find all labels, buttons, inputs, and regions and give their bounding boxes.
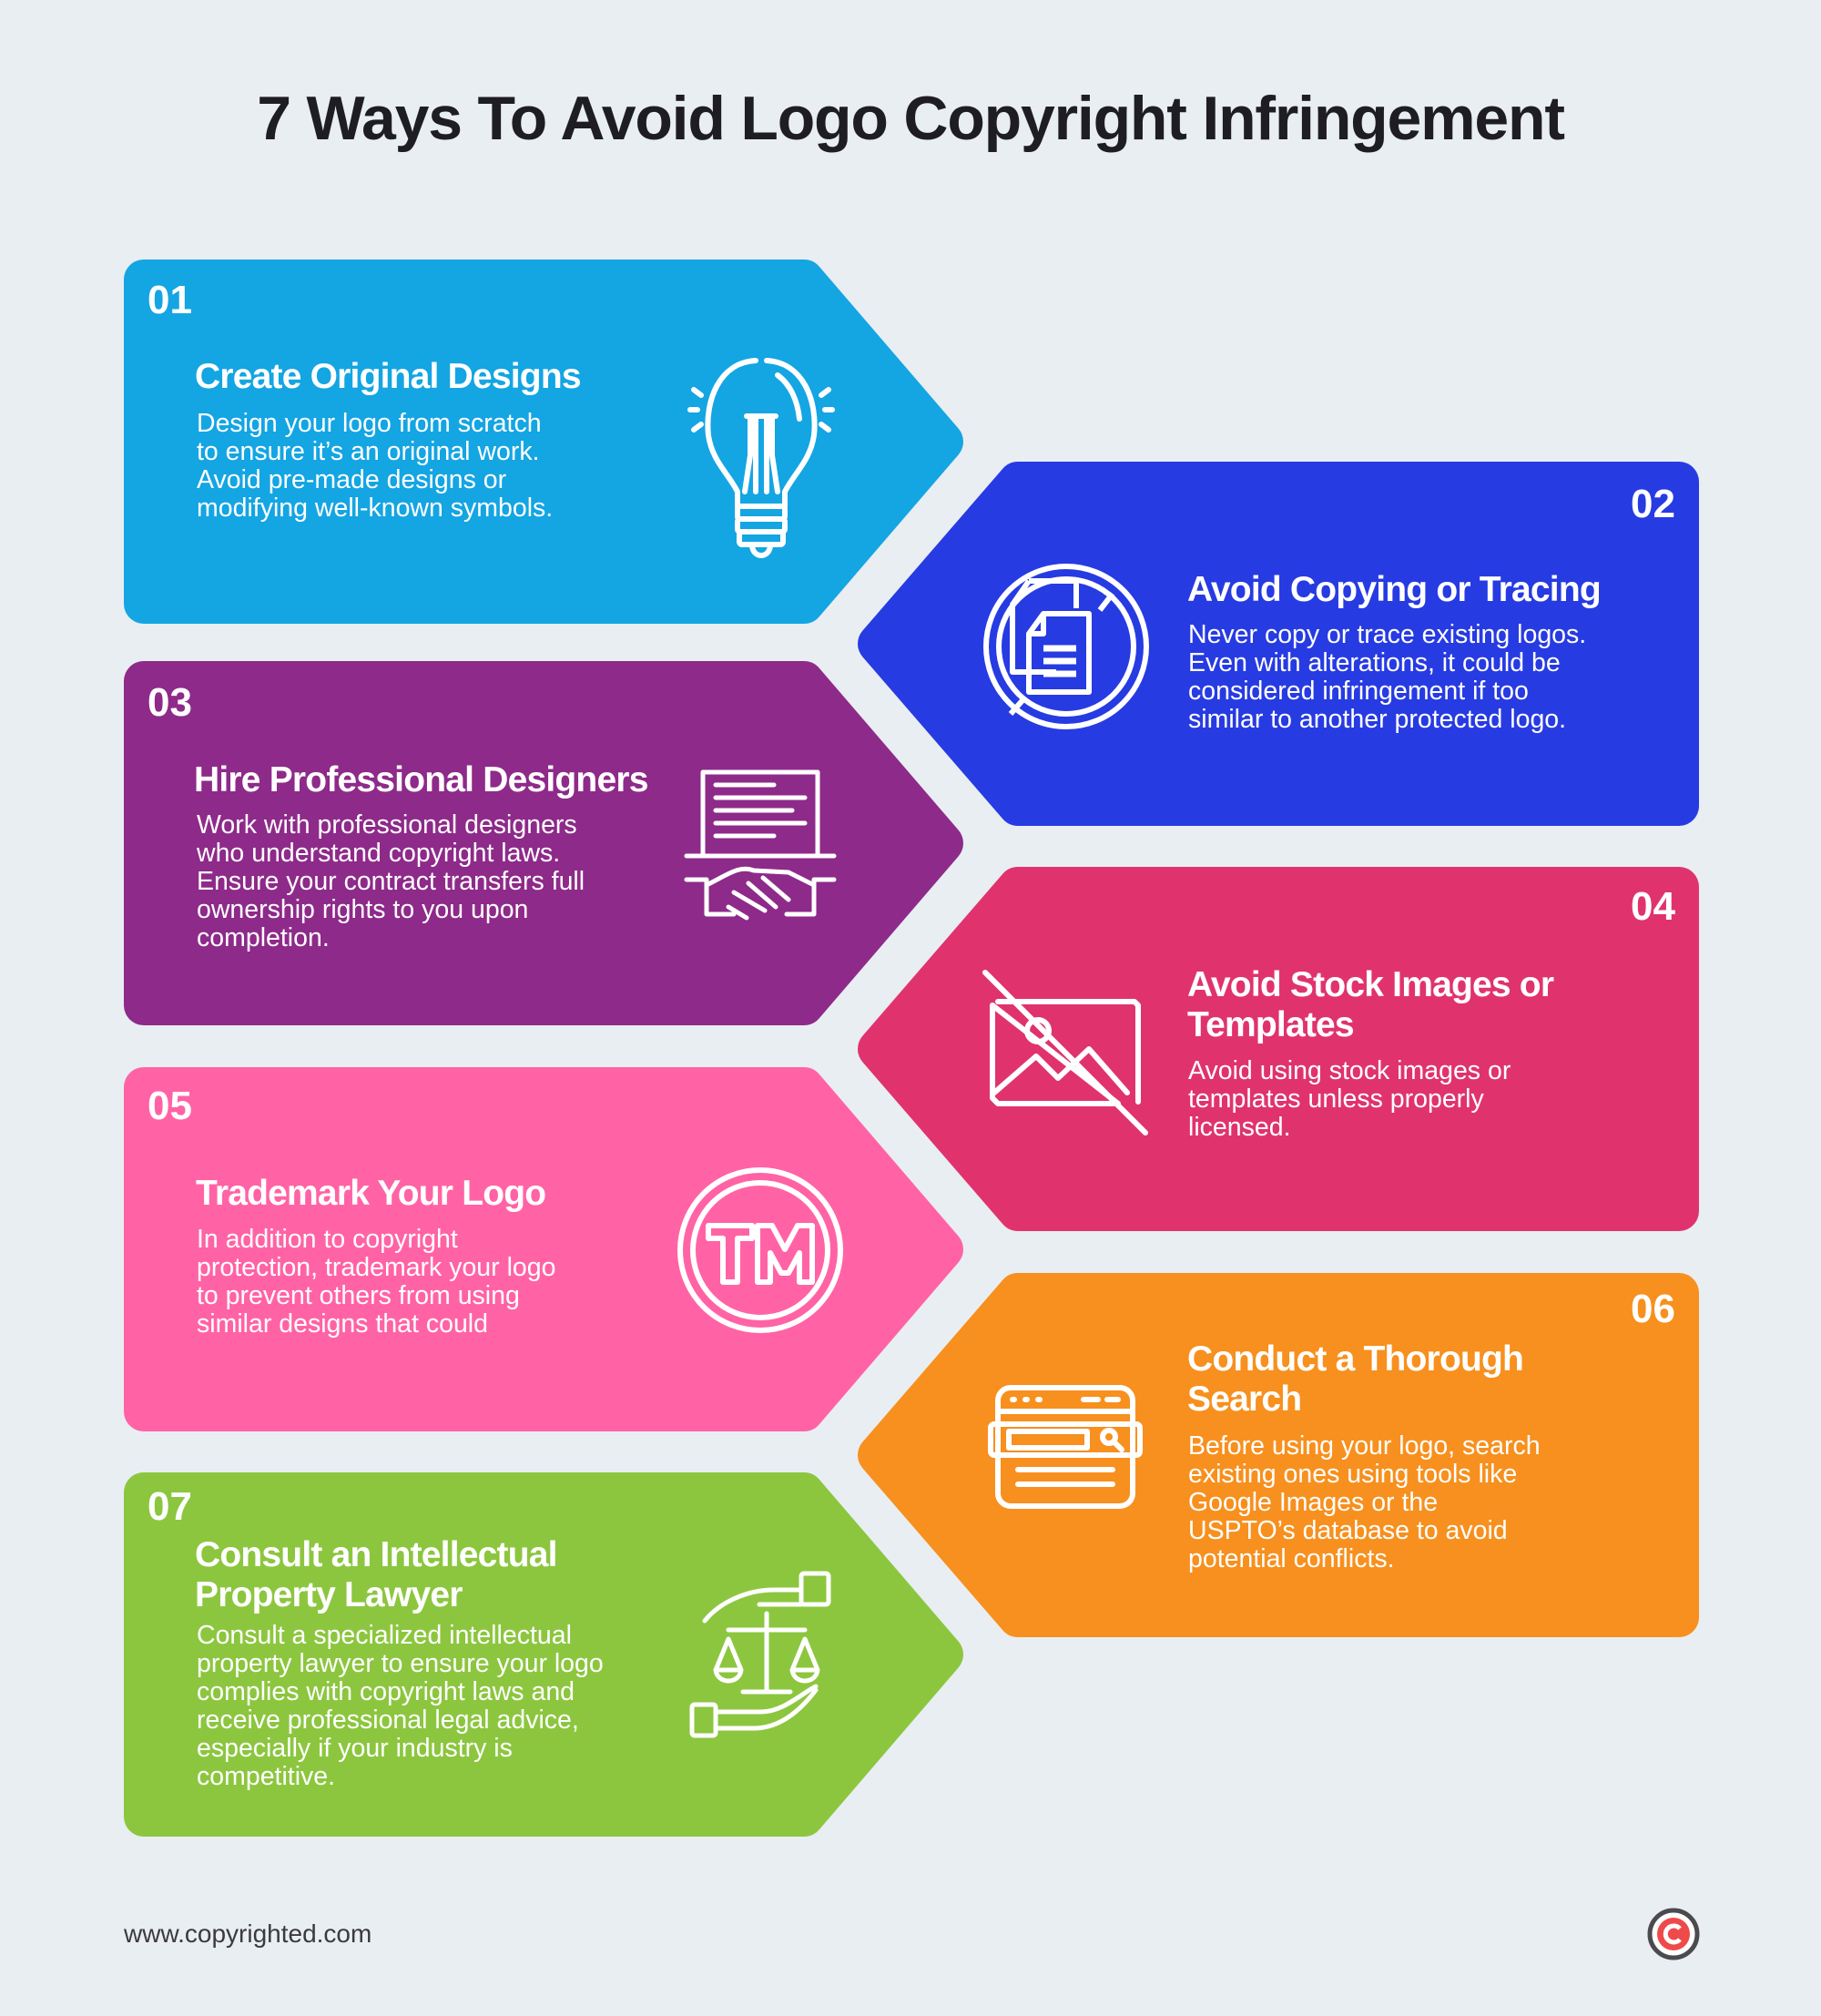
icon: trademark [680,1170,840,1330]
text: Avoid Copying or Tracing [1187,570,1601,609]
panel 6 text [1187,1287,1675,1573]
footer url: www.copyrighted.com [124,1919,371,1948]
text: to prevent others from using [197,1281,520,1310]
text: similar designs that could [197,1309,488,1339]
text: 06 [1631,1287,1675,1331]
text: Even with alterations, it could be [1188,648,1561,677]
text: Avoid pre-made designs or [197,465,506,494]
text: licensed. [1188,1113,1290,1142]
icon: law scales in hands [692,1573,829,1736]
text: potential conflicts. [1188,1544,1395,1573]
footer logo [1648,1909,1699,1960]
text: 02 [1631,482,1675,526]
icon: no copying [986,566,1146,727]
text: Never copy or trace existing logos. [1188,620,1586,649]
text: Conduct a Thorough [1187,1339,1523,1379]
text: Search [1187,1380,1301,1419]
panel 5 text [148,1084,555,1339]
text: Google Images or the [1188,1488,1438,1517]
panel 4 text [1187,884,1675,1142]
text: Ensure your contract transfers full [197,867,585,896]
panel 2 shape [878,482,1679,806]
text: completion. [197,923,330,952]
panel 5 shape [144,1087,943,1411]
text: 04 [1631,884,1675,929]
text: especially if your industry is [197,1734,513,1763]
text: receive professional legal advice, [197,1705,579,1735]
text: similar to another protected logo. [1188,705,1566,734]
text: templates unless properly [1188,1084,1484,1114]
text: Templates [1187,1005,1354,1044]
icon: light bulb [690,361,832,555]
text: to ensure it’s an original work. [197,437,539,466]
text: In addition to copyright [197,1225,458,1254]
panel 1 text [148,278,581,523]
panel 1 shape [144,280,943,604]
text: Hire Professional Designers [194,760,648,799]
text: 05 [148,1084,192,1128]
text: Trademark Your Logo [196,1174,545,1213]
panel 3 text [148,680,648,952]
icon: browser search [991,1388,1140,1506]
text: Consult an Intellectual [195,1535,557,1574]
text: modifying well-known symbols. [197,494,553,523]
text: Property Lawyer [195,1575,463,1614]
text: competitive. [197,1762,335,1791]
text: 01 [148,278,192,322]
text: protection, trademark your logo [197,1253,555,1282]
text: property lawyer to ensure your logo [197,1649,604,1678]
panel 7 text [148,1484,604,1791]
text: Create Original Designs [195,357,581,396]
text: who understand copyright laws. [197,839,560,868]
text: Work with professional designers [197,810,577,840]
text: complies with copyright laws and [197,1677,575,1706]
text: 03 [148,680,192,725]
text: existing ones using tools like [1188,1460,1517,1489]
text: Avoid using stock images or [1188,1056,1511,1085]
text: Consult a specialized intellectual [197,1621,572,1650]
panel 7 shape [144,1492,943,1817]
text: Design your logo from scratch [197,409,542,438]
text: USPTO’s database to avoid [1188,1516,1508,1545]
panel 4 shape [878,887,1679,1211]
text: 07 [148,1484,192,1529]
text: Before using your logo, search [1188,1431,1541,1461]
panel 2 text [1187,482,1675,734]
title: 7 Ways To Avoid Logo Copyright Infringement [257,84,1564,153]
panel 6 shape [878,1293,1679,1617]
text: ownership rights to you upon [197,895,528,924]
panel 3 shape [144,681,943,1005]
icon: handshake contract [687,772,834,918]
text: Avoid Stock Images or [1187,965,1553,1004]
text: considered infringement if too [1188,677,1529,706]
icon: no images [985,972,1145,1133]
